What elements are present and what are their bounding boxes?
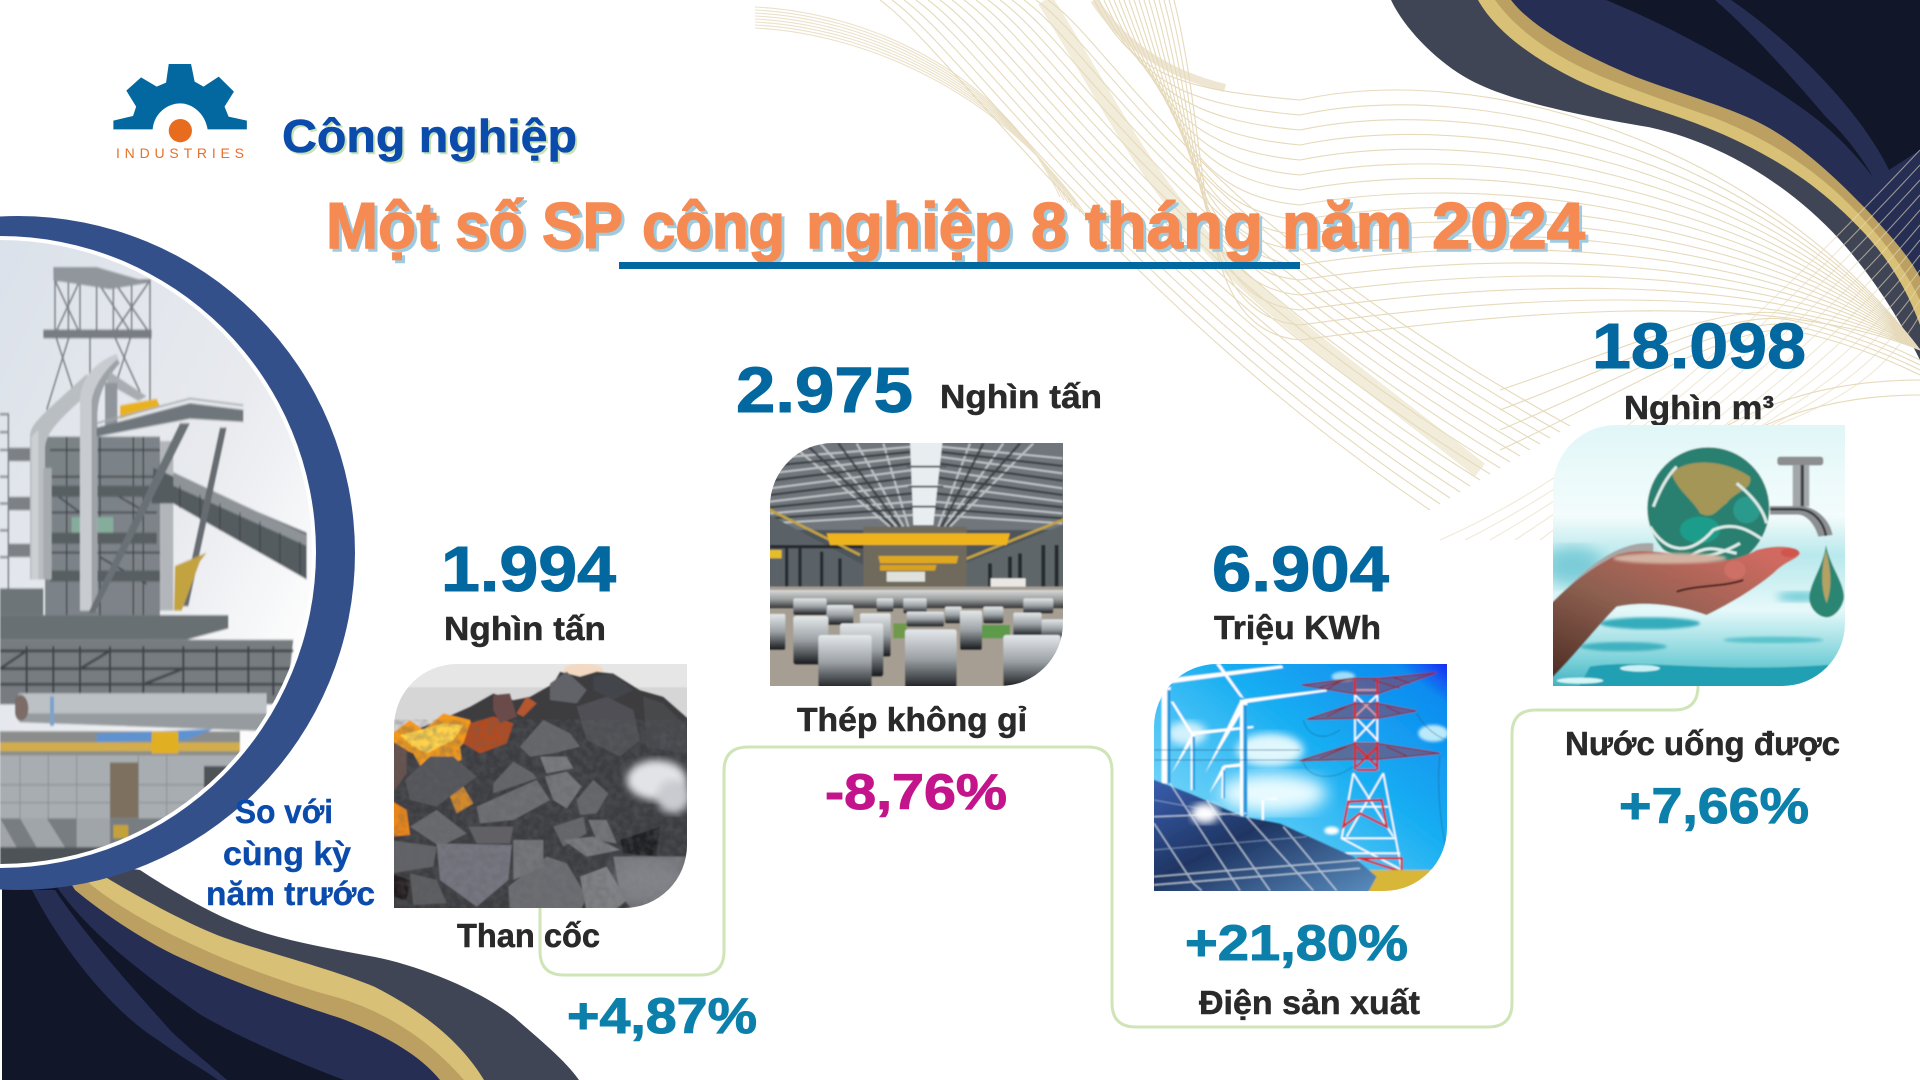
value: 2.975 — [736, 354, 913, 426]
title — [326, 189, 1585, 262]
icon: gear — [113, 64, 247, 142]
photo circle: steel plant — [0, 216, 355, 896]
title: Một — [326, 189, 437, 262]
panel: than coc — [390, 533, 757, 1044]
top-right wave decoration — [1391, 0, 1920, 360]
change: +7,66% — [1619, 778, 1809, 834]
note: So với cùng kỳ năm trước — [206, 793, 375, 912]
panel: nuoc uong duoc — [1543, 310, 1850, 834]
product name: Điện sản xuất — [1199, 984, 1420, 1021]
unit: Nghìn tấn — [444, 610, 606, 647]
title: tháng — [1085, 189, 1263, 262]
unit: Nghìn m³ — [1624, 389, 1774, 426]
title: số — [455, 189, 525, 262]
connector line — [540, 686, 1698, 1027]
panel: dien san xuat — [1150, 533, 1450, 1021]
unit: Nghìn tấn — [940, 378, 1102, 415]
product name: Than cốc — [457, 917, 600, 954]
bottom-left wave decoration — [2, 850, 579, 1080]
photo: burning coke — [390, 660, 690, 912]
value: 1.994 — [441, 533, 616, 605]
note: So với cùng kỳ năm trước: So với — [235, 793, 333, 830]
product name: Nước uống được — [1565, 725, 1840, 762]
title: 2024 — [1432, 189, 1585, 262]
title: công — [642, 189, 785, 262]
title underline — [619, 262, 1300, 269]
title: năm — [1282, 189, 1412, 262]
product name: Thép không gỉ — [797, 701, 1027, 738]
heading: Công nghiệp: Công nghiệp — [282, 110, 577, 162]
change: -8,76% — [825, 764, 1007, 820]
logo wordmark: INDUSTRIES — [116, 145, 244, 161]
logo: gear industries — [113, 64, 247, 161]
change: +21,80% — [1185, 915, 1408, 971]
change: +4,87% — [567, 988, 757, 1044]
note: So với cùng kỳ năm trước: cùng kỳ — [223, 835, 352, 872]
title: SP — [542, 189, 623, 262]
title: nghiệp — [806, 189, 1012, 262]
decorative line mesh — [755, 0, 1920, 540]
photo: steel coil warehouse — [767, 440, 1067, 690]
photo: hand earth tap — [1543, 421, 1850, 691]
title: 8 — [1031, 189, 1067, 262]
value: 18.098 — [1592, 310, 1806, 382]
unit: Triệu KWh — [1214, 609, 1381, 646]
photo: wind solar pylon — [1150, 660, 1450, 895]
value: 6.904 — [1212, 533, 1389, 605]
panel: thep khong gi — [736, 354, 1102, 820]
note: So với cùng kỳ năm trước: năm trước — [206, 875, 375, 912]
